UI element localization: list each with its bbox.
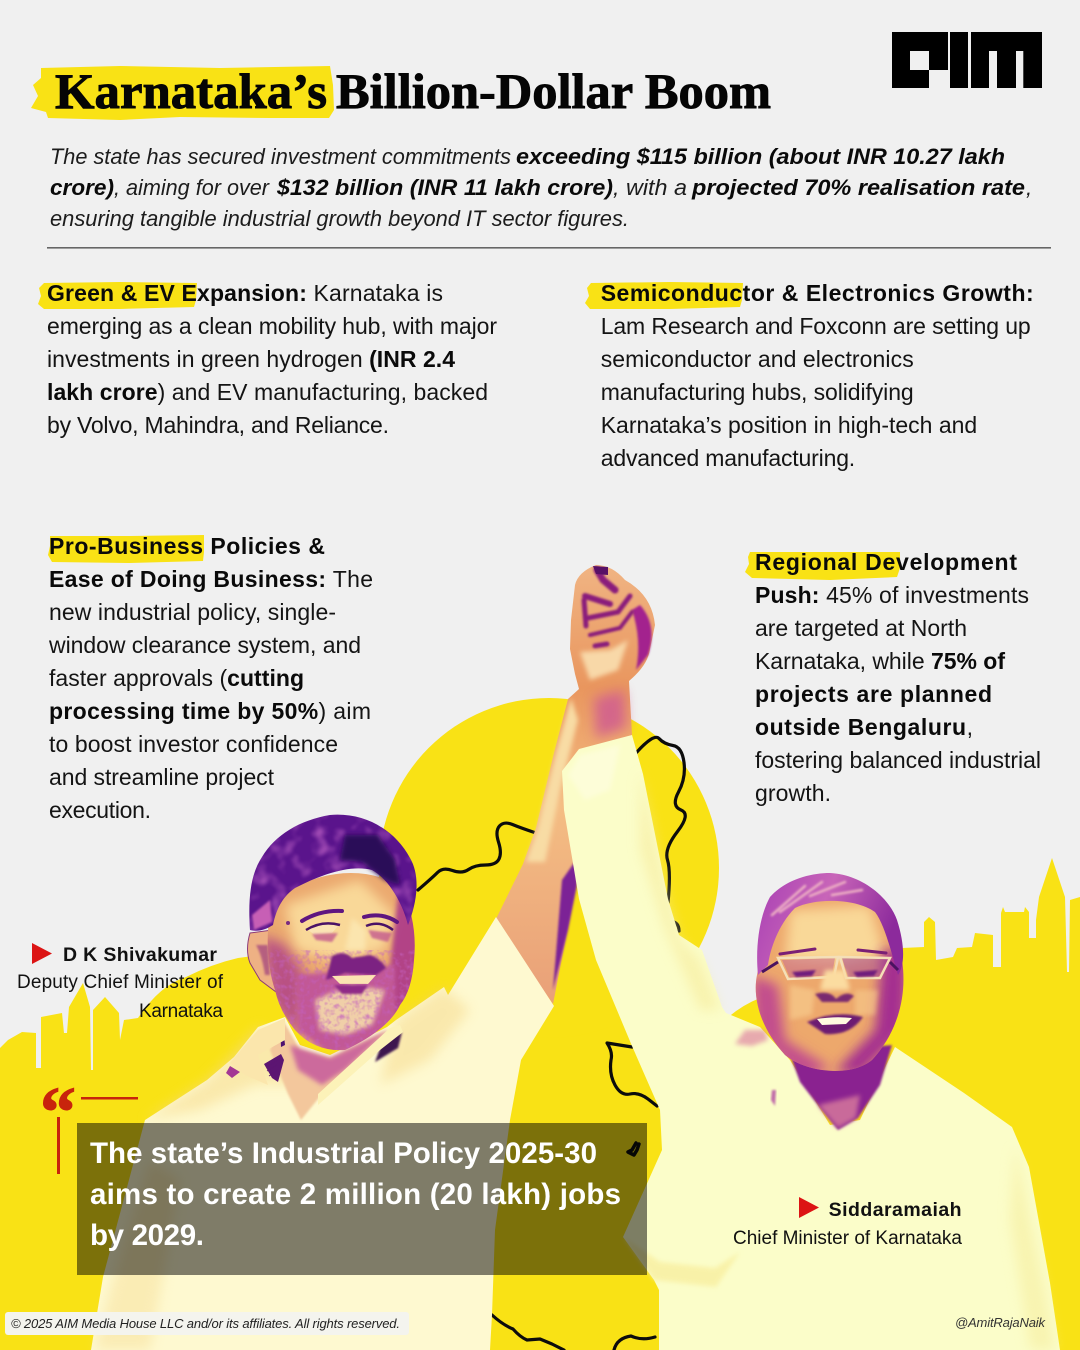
text block: Pro-Business Policies: new industrial policy, single- bbox=[49, 599, 336, 625]
quote text: aims to create 2 million (20 lakh) jobs bbox=[90, 1178, 621, 1211]
quote text: The state’s Industrial Policy 2025-30 bbox=[90, 1137, 597, 1170]
intro text: $132 billion (INR 11 lakh crore) bbox=[276, 175, 613, 200]
intro text: projected 70% realisation rate bbox=[691, 175, 1025, 200]
text block: Regional Development Push: Karnataka, while 75% of bbox=[755, 648, 1005, 674]
quote mark: “ bbox=[40, 1072, 76, 1152]
intro text bbox=[50, 144, 1032, 231]
text block: Regional Development Push: outside Bengaluru, bbox=[755, 714, 973, 740]
figure: Siddaramaiah bbox=[562, 735, 1060, 1350]
nose and mouth bbox=[807, 970, 863, 1034]
caption: Siddaramaiah: Chief Minister of Karnataka bbox=[733, 1228, 962, 1249]
credit handle: @AmitRajaNaik bbox=[955, 1315, 1046, 1330]
highlight: Semiconduc bbox=[585, 282, 743, 309]
text block: Regional Development Push: fostering balanced industrial bbox=[755, 747, 1041, 773]
text block: Semiconductor & Electronics Growth: Lam Research and Foxconn are setting up bbox=[601, 313, 1031, 339]
icon: red triangle bbox=[32, 943, 52, 964]
eyes, brows, nose, mouth bbox=[286, 911, 397, 994]
logo: AIM bbox=[892, 32, 1042, 88]
text block: Pro-Business Policies: processing time by 50%) aim bbox=[49, 698, 371, 724]
text block: Pro-Business Policies: Pro-Business Policies & bbox=[49, 533, 325, 559]
quote box bbox=[77, 1123, 647, 1275]
text block: Green & EV Expansion: by Volvo, Mahindra, and Reliance. bbox=[47, 412, 389, 438]
intro text: crore) bbox=[50, 175, 114, 200]
divider bbox=[47, 247, 1051, 249]
shirt and raised sleeve bbox=[562, 735, 1060, 1350]
text block: Regional Development Push: Push: 45% of investments bbox=[755, 582, 1029, 608]
shirt bbox=[91, 917, 554, 1350]
text block: Green & EV Expansion: lakh crore) and EV manufacturing, backed bbox=[47, 379, 488, 405]
yellow skyline ground bbox=[0, 858, 1080, 1350]
caption: D K Shivakumar: Karnataka bbox=[139, 1001, 223, 1022]
raised arm and fist bbox=[495, 565, 655, 1004]
text block: Regional Development Push: Regional Development bbox=[755, 549, 1017, 575]
yellow circle bbox=[379, 698, 719, 1038]
intro text: , bbox=[1026, 175, 1032, 200]
text block: Pro-Business Policies: and streamline project bbox=[49, 764, 275, 790]
hair bbox=[249, 814, 417, 931]
text block: Green & EV Expansion: investments in green hydrogen (INR 2.4 bbox=[47, 346, 455, 372]
icon: red triangle bbox=[799, 1197, 819, 1218]
intro text: ensuring tangible industrial growth beyond IT sector figures. bbox=[50, 206, 629, 231]
text block: Green & EV Expansion bbox=[38, 280, 497, 438]
ear bbox=[248, 930, 282, 992]
collar and necklace bbox=[226, 1018, 403, 1120]
hair bbox=[757, 873, 903, 975]
text block: Semiconductor & Electronics Growth: semiconductor and electronics bbox=[601, 346, 914, 372]
copyright footer: © 2025 AIM Media House LLC and/or its affiliates. All rights reserved. bbox=[11, 1316, 400, 1331]
text block: Semiconductor & Electronics Growth: Karnataka’s position in high-tech and bbox=[601, 412, 977, 438]
highlight: Pro-Business bbox=[48, 535, 204, 563]
text block: Pro-Business Policies: Ease of Doing Business: The bbox=[49, 566, 373, 592]
title highlight bbox=[31, 66, 334, 120]
text block: Semiconductor & Electronics Growth bbox=[585, 280, 1034, 471]
neck bbox=[790, 1045, 892, 1130]
face bbox=[268, 873, 415, 1050]
title: Karnataka’s bbox=[55, 63, 327, 119]
text block: Semiconductor & Electronics Growth: manufacturing hubs, solidifying bbox=[601, 379, 914, 405]
copyright footer bbox=[5, 1312, 409, 1335]
text block: Pro-Business Policies: faster approvals (cutting bbox=[49, 665, 304, 691]
text block: Semiconductor & Electronics Growth: Semiconductor & Electronics Growth: bbox=[601, 280, 1034, 306]
text block: Regional Development Push: growth. bbox=[755, 780, 831, 806]
intro text: , with a bbox=[613, 175, 687, 200]
callout: industrial policy quote bbox=[40, 1072, 647, 1275]
text block: Semiconductor & Electronics Growth: advanced manufacturing. bbox=[601, 445, 855, 471]
highlight: Green & EV bbox=[38, 282, 197, 309]
text block: Regional Development Push: projects are planned bbox=[755, 681, 992, 707]
map outline of Karnataka bbox=[418, 737, 685, 1350]
text block: Pro-Business Policies: to boost investor confidence bbox=[49, 731, 338, 757]
quote text: by 2029. bbox=[90, 1219, 204, 1252]
text block: Green & EV Expansion: Green & EV Expansion: Karnataka is bbox=[47, 280, 443, 306]
intro text: The state has secured investment commitments bbox=[50, 144, 511, 169]
text block: Pro-Business Policies bbox=[48, 533, 373, 823]
face bbox=[756, 900, 904, 1071]
intro text: exceeding $115 billion (about INR 10.27 lakh bbox=[516, 144, 1005, 169]
figure: D K Shivakumar bbox=[91, 565, 655, 1350]
quote text bbox=[90, 1137, 621, 1252]
intro text: , aiming for over bbox=[114, 175, 270, 200]
text block: Regional Development Push: are targeted at North bbox=[755, 615, 967, 641]
caption: D K Shivakumar bbox=[17, 943, 224, 1022]
text block: Green & EV Expansion: emerging as a clean mobility hub, with major bbox=[47, 313, 497, 339]
title bbox=[55, 63, 771, 119]
caption: D K Shivakumar: D K Shivakumar bbox=[63, 944, 217, 966]
glasses bbox=[762, 949, 898, 979]
caption: D K Shivakumar: Deputy Chief Minister of bbox=[17, 972, 224, 993]
text block: Regional Development Push bbox=[745, 549, 1041, 806]
caption: Siddaramaiah: Siddaramaiah bbox=[829, 1199, 962, 1221]
text block: Pro-Business Policies: window clearance system, and bbox=[48, 632, 361, 658]
caption: Siddaramaiah bbox=[733, 1197, 962, 1249]
highlight: Regional De bbox=[745, 552, 900, 580]
quote mark bbox=[40, 1072, 138, 1174]
text block: Pro-Business Policies: execution. bbox=[49, 797, 151, 823]
title: Billion-Dollar Boom bbox=[336, 63, 771, 119]
